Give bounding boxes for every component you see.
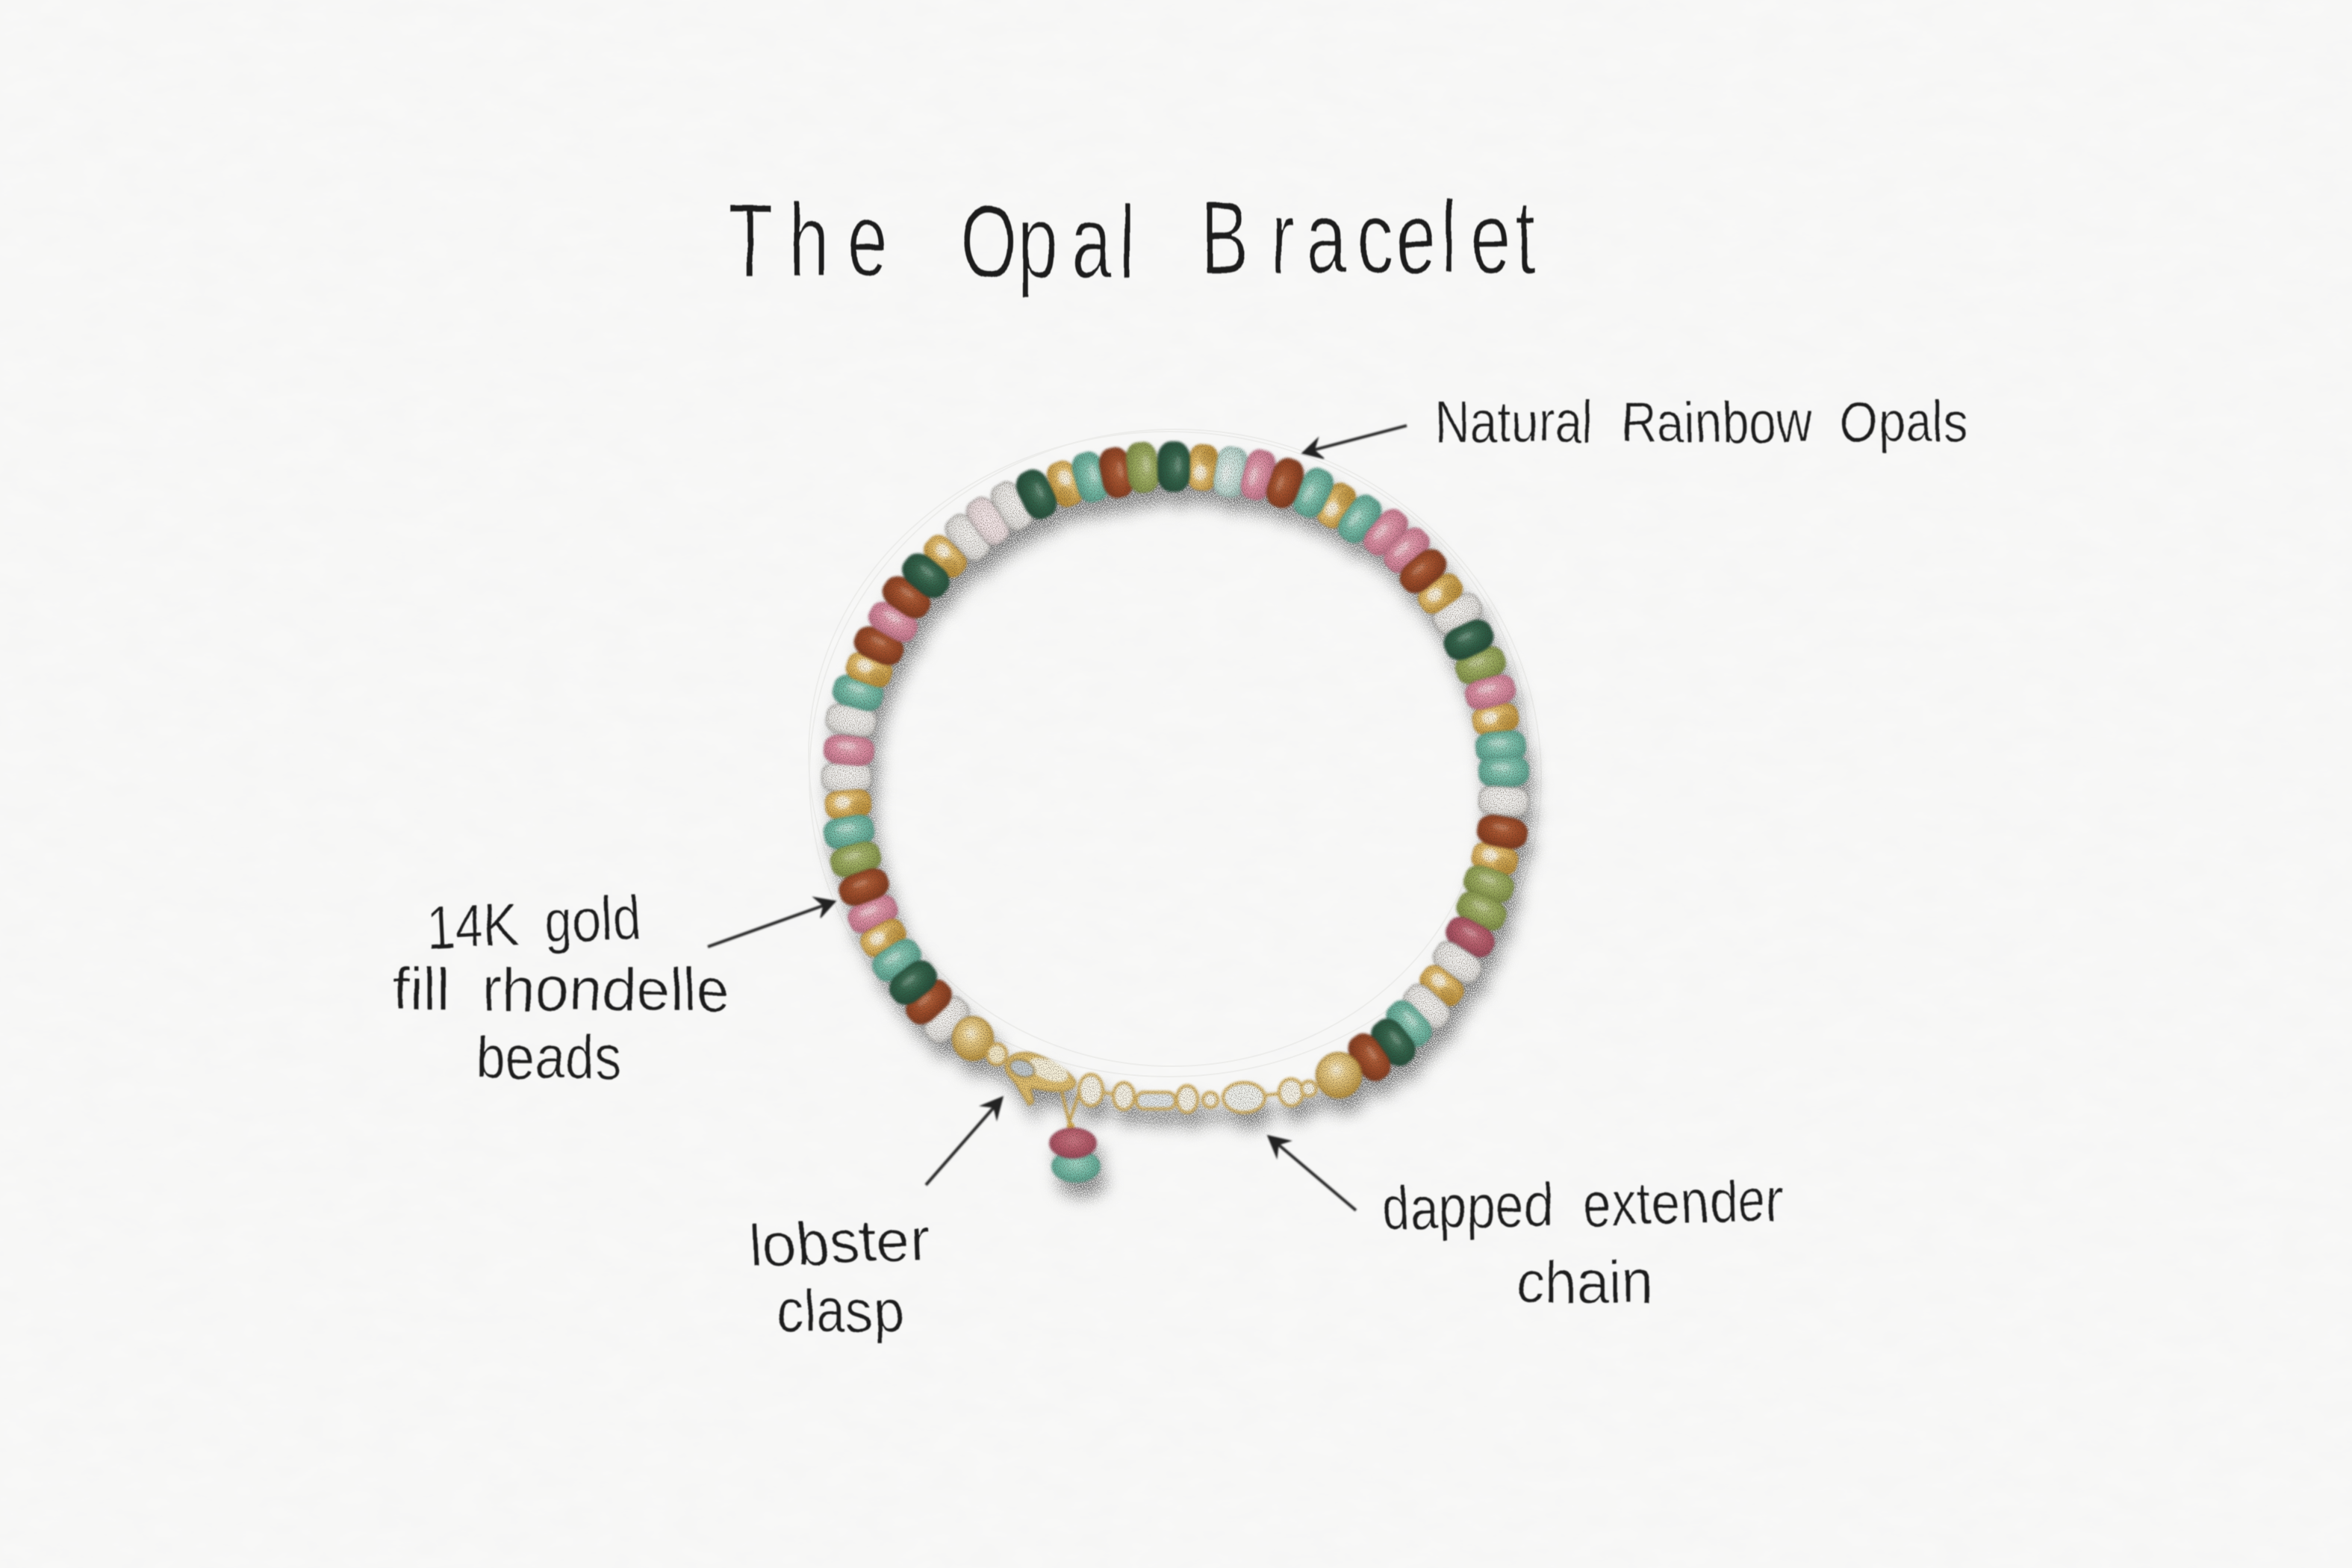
label: dapped extender chain <box>1380 1166 1784 1316</box>
arrow: lobster clasp <box>926 1097 1003 1185</box>
label: lobster clasp <box>748 1206 931 1345</box>
pencil guide arcs <box>809 429 1541 1124</box>
bracelet illustration <box>822 441 1529 1182</box>
label: dapped extender chain: chain <box>1516 1248 1653 1316</box>
arrow: extender chain <box>1268 1136 1356 1210</box>
opal and gold rhondelle beads <box>822 441 1529 1086</box>
label: 14K gold fill rhondelle beads <box>393 884 730 1092</box>
label: lobster clasp: lobster <box>748 1206 931 1280</box>
label: natural rainbow opals: Natural Rainbow Opals <box>1434 389 1968 455</box>
clasp bail <box>1062 1092 1080 1130</box>
label: 14K gold fill rhondelle beads: 14K gold <box>425 884 643 962</box>
dapped extender chain <box>1079 1074 1316 1113</box>
label: dapped extender chain: dapped extender <box>1380 1166 1784 1243</box>
arrow: gold beads <box>708 897 836 947</box>
label: 14K gold fill rhondelle beads: fill rhondelle <box>393 956 730 1024</box>
dangling charm beads <box>1050 1128 1100 1182</box>
label: 14K gold fill rhondelle beads: beads <box>476 1024 621 1092</box>
arrow: natural rainbow opals <box>1302 426 1407 458</box>
title: The Opal Bracelet <box>728 179 1536 300</box>
label: lobster clasp: clasp <box>776 1277 904 1345</box>
lobster clasp <box>1006 1053 1075 1105</box>
gold end beads <box>953 1017 1361 1098</box>
